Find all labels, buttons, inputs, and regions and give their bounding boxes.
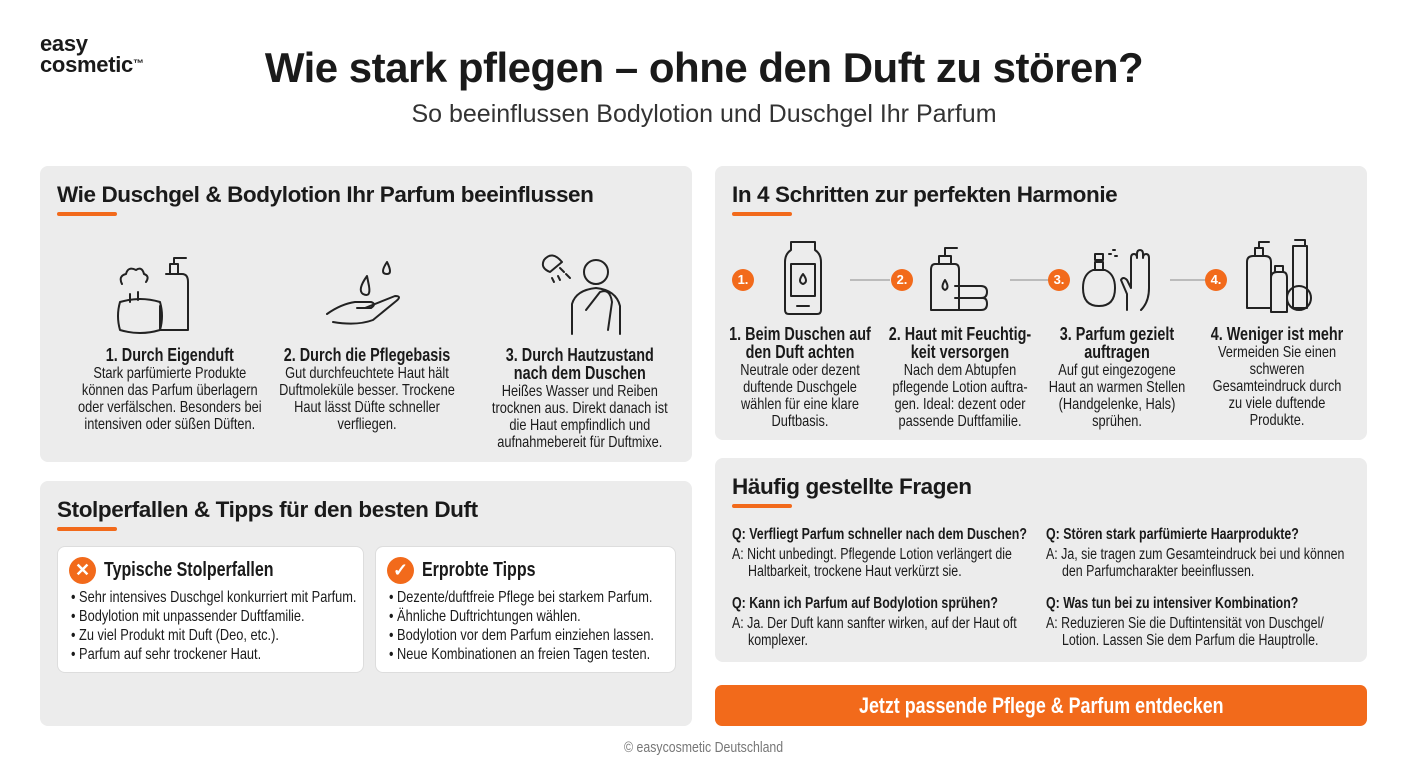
faq 1: Haltbarkeit, trockene Haut verkürzt sie. [748,563,962,580]
text: step 3: Auf gut eingezogene [1058,362,1176,379]
button: CTA [715,685,1367,726]
faq 3: A: Ja. Der Duft kann sanfter wirken, auf der Haut oft [732,615,1017,632]
heading: steps: In 4 Schritten zur perfekten Harmonie [732,182,1117,207]
card: pitfalls: Zu viel Produkt mit Duft (Deo, etc.). [79,627,279,644]
text: Hautzustand [492,345,668,451]
panel: influence [40,166,692,462]
text: step 1: duftende Duschgele [743,379,857,396]
subtitle: So beeinflussen Bodylotion und Duschgel Ihr Parfum [411,100,997,128]
text: step 3: auftragen [1084,342,1150,362]
card: tips: Dezente/duftfreie Pflege bei starkem Parfum. [397,589,652,606]
footer: © easycosmetic Deutschland [624,740,784,756]
card: tips: Neue Kombinationen an freien Tagen testen. [397,646,650,663]
text: step 4: Gesamteindruck durch [1213,378,1341,395]
panel: steps: 2. [897,272,907,287]
text: step 1: 1. Beim Duschen auf [729,324,871,344]
faq 3: Q: Kann ich Parfum auf Bodylotion sprühen? [732,595,998,612]
heading: pitfalls: Stolperfallen & Tipps für den besten Duft [57,497,478,522]
text: step 4: zu viele duftende [1229,395,1325,412]
faq 4: Lotion. Lassen Sie dem Parfum die Hauptrolle. [1062,632,1318,649]
step numbers [732,269,754,291]
faq 1: Q: Verfliegt Parfum schneller nach dem Duschen? [732,526,1027,543]
text: Hautzustand: Heißes Wasser und Reiben [502,383,658,400]
faq 1 [732,526,1027,580]
text: step 1: wählen für eine klare [741,396,859,413]
text: Hautzustand: nach dem Duschen [514,363,646,383]
text: Hautzustand: 3. Durch Hautzustand [506,345,654,365]
text: Eigenduft: oder verfälschen. Besonders bei [78,399,262,416]
step numbers: 1. [738,272,748,287]
heading: influence: Wie Duschgel & Bodylotion Ihr Parfum beeinflussen [57,182,594,207]
text: step 1: Neutrale oder dezent [740,362,860,379]
icon: x [69,557,96,584]
text: step 2: pflegende Lotion auftra- [892,379,1028,396]
button: CTA: Jetzt passende Pflege & Parfum entdecken [859,693,1223,718]
panel: steps: 3. [1054,272,1064,287]
icon: check [387,557,414,584]
icon: shower gel [784,241,822,315]
icon: many products [1246,239,1312,313]
text: Eigenduft: intensiven oder süßen Düften. [84,416,255,433]
text: Pflegebasis: Haut lässt Düfte schneller [294,399,440,416]
text: Eigenduft: Stark parfümierte Produkte [93,365,246,382]
faq 4: A: Reduzieren Sie die Duftintensität von Duschgel/ [1046,615,1324,632]
icon: hand with drops [326,261,400,325]
card: tips: Ähnliche Duftrichtungen wählen. [397,608,581,625]
text: step 1: den Duft achten [746,342,854,362]
text: step 4: schweren [1250,361,1304,378]
title: Wie stark pflegen – ohne den Duft zu stören? [265,44,1143,91]
text: Hautzustand: die Haut empfindlich und [509,417,650,434]
text: Eigenduft: 1. Durch Eigenduft [106,345,234,365]
text: step 4: Produkte. [1250,412,1304,429]
logo: easy [40,31,88,56]
icon: perfume and hand [1082,249,1150,311]
text: step 4 [1210,324,1343,429]
heading: FAQ: Häufig gestellte Fragen [732,474,972,499]
faq 3 [732,595,1017,649]
text: step 4: Vermeiden Sie einen [1218,344,1336,361]
text: step 3: Haut an warmen Stellen [1049,379,1185,396]
text: step 4: 4. Weniger ist mehr [1211,324,1343,344]
card: pitfalls: Sehr intensives Duschgel konkurriert mit Parfum. [79,589,356,606]
text: step 3: sprühen. [1092,413,1142,430]
faq 2 [1046,526,1344,580]
faq 4: Q: Was tun bei zu intensiver Kombination? [1046,595,1298,612]
card: pitfalls: Parfum auf sehr trockener Haut. [79,646,261,663]
logo: cosmetic™ [40,52,144,77]
text: step 3 [1049,324,1185,430]
text: Pflegebasis [279,345,455,433]
panel: steps [715,166,1367,440]
panel: steps: 4. [1211,272,1221,287]
icon: x: ✕ [75,560,90,580]
text: Pflegebasis: Gut durchfeuchtete Haut hält [285,365,449,382]
logo [40,31,144,77]
text: step 2: Nach dem Abtupfen [904,362,1016,379]
text: step 2: 2. Haut mit Feuchtig- [889,324,1031,344]
text: Pflegebasis: 2. Durch die Pflegebasis [284,345,450,365]
text: step 2 [889,324,1031,430]
card: tips: Bodylotion vor dem Parfum einziehen lassen. [397,627,654,644]
text: step 1 [729,324,871,430]
text: step 1: Duftbasis. [772,413,828,430]
card: pitfalls: Typische Stolperfallen [104,559,274,581]
text: step 3: (Handgelenke, Hals) [1059,396,1175,413]
panel: pitfalls and tips [40,481,692,726]
card: tips [375,546,676,673]
text: Eigenduft: können das Parfum überlagern [82,382,258,399]
text: Eigenduft [78,345,262,433]
card: pitfalls: Bodylotion mit unpassender Duftfamilie. [79,608,305,625]
faq 1: A: Nicht unbedingt. Pflegende Lotion verlängert die [732,546,1012,563]
faq 3: komplexer. [748,632,808,649]
card: tips: Erprobte Tipps [422,559,536,581]
faq 2: A: Ja, sie tragen zum Gesamteindruck bei und können [1046,546,1344,563]
card: pitfalls [57,546,364,673]
connector lines [850,279,890,281]
icon: soap and bottle [117,257,189,334]
icon: shower person [542,254,621,335]
faq 2: Q: Stören stark parfümierte Haarprodukte? [1046,526,1299,543]
text: step 2: gen. Ideal: dezent oder [895,396,1025,413]
text: Pflegebasis: verfliegen. [337,416,397,433]
icon: check: ✓ [393,560,408,580]
text: Pflegebasis: Duftmoleküle besser. Trockene [279,382,455,399]
faq 2: den Parfumcharakter beeinflussen. [1062,563,1254,580]
text: step 2: passende Duftfamilie. [898,413,1022,430]
faq 4 [1046,595,1324,649]
icon: pump and towel [930,247,988,311]
text: Hautzustand: aufnahmebereit für Duftmixe. [497,434,662,451]
text: step 3: 3. Parfum gezielt [1060,324,1174,344]
panel: FAQ [715,458,1367,662]
text: step 2: keit versorgen [911,342,1009,362]
text: Hautzustand: trocknen aus. Direkt danach ist [492,400,668,417]
